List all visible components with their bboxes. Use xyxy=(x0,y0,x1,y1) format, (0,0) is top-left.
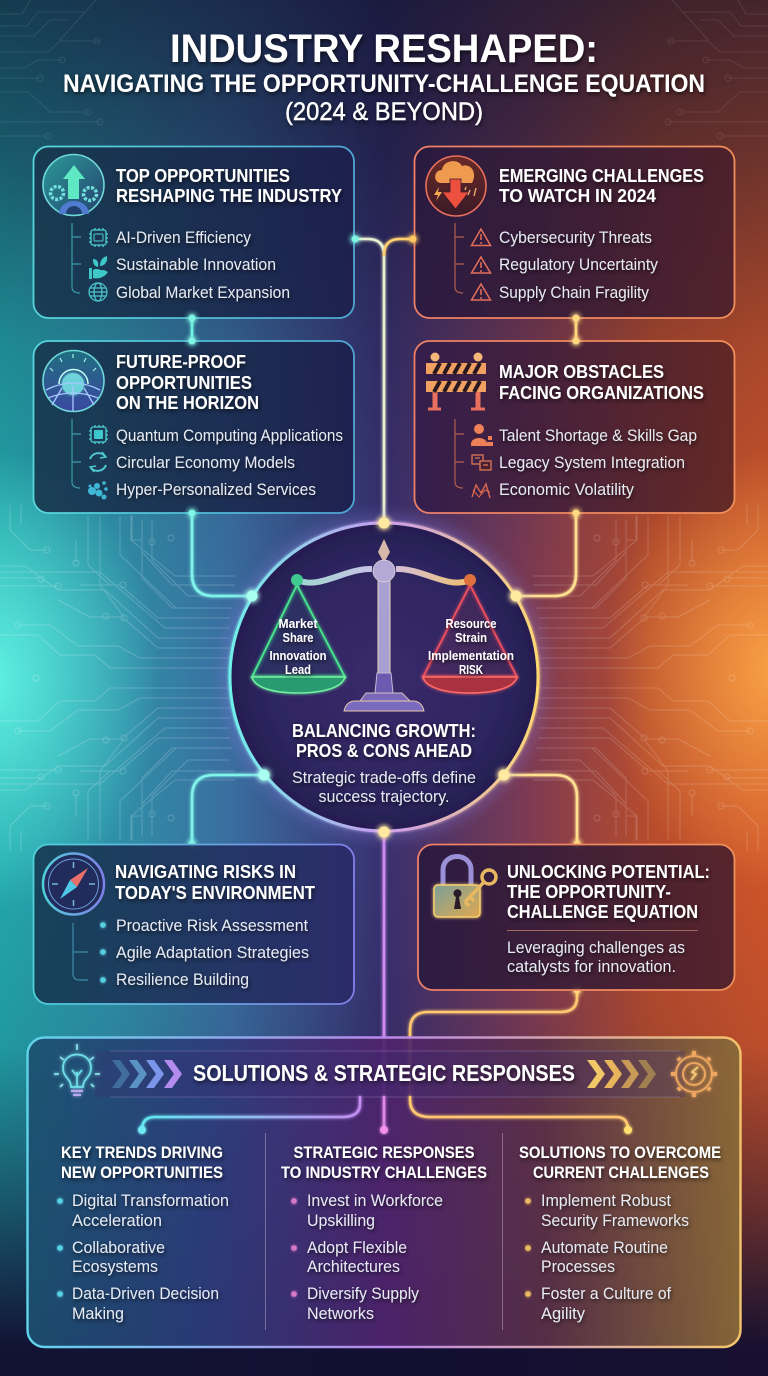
connector nodes: panel joints xyxy=(188,236,580,994)
list items: AI-Driven Efficiency xyxy=(116,228,251,247)
redrawn connectors inside panel xyxy=(142,1097,628,1130)
chevrons left xyxy=(112,1060,182,1088)
icon: light bulb xyxy=(54,1044,100,1095)
list items: Proactive Risk Assessment xyxy=(116,916,308,935)
icon: arrow and gears xyxy=(43,154,104,216)
heading: FUTURE-PROOF xyxy=(116,351,246,372)
description: Leveraging challenges as xyxy=(507,938,685,957)
circle heading: PROS & CONS AHEAD xyxy=(296,740,472,761)
connector nodes xyxy=(138,1126,632,1134)
column items: Digital Transformation xyxy=(72,1191,229,1210)
column items: Architectures xyxy=(307,1257,400,1276)
heading: MAJOR OBSTACLES xyxy=(499,361,664,382)
heading: UNLOCKING POTENTIAL: xyxy=(507,861,710,882)
column items: Making xyxy=(72,1304,124,1323)
list items: Legacy System Integration xyxy=(499,453,685,472)
panel: future-proof opportunities xyxy=(34,341,354,513)
list items: Regulatory Uncertainty xyxy=(499,255,658,274)
heading: TOP OPPORTUNITIES xyxy=(116,165,290,186)
icon: legacy system blocks xyxy=(472,455,491,470)
icon: quantum chip xyxy=(89,425,108,444)
pan labels xyxy=(270,617,514,677)
icon: gear with leaf xyxy=(671,1051,717,1097)
icon: warning triangles xyxy=(472,229,490,300)
list items: Agile Adaptation Strategies xyxy=(116,943,309,962)
bullets xyxy=(100,922,106,983)
list items xyxy=(499,228,658,302)
list items: Economic Volatility xyxy=(499,480,634,499)
title xyxy=(63,27,705,126)
column items: Networks xyxy=(307,1304,374,1323)
column dividers xyxy=(266,1133,502,1330)
icon: sprout in hand xyxy=(89,256,108,279)
bullets xyxy=(57,1198,63,1297)
column heading: KEY TRENDS DRIVING xyxy=(61,1143,223,1162)
list items: Circular Economy Models xyxy=(116,453,295,472)
description xyxy=(507,938,685,976)
icon: horizon xyxy=(43,350,104,412)
panel: navigating risks xyxy=(34,844,354,1004)
list items: Supply Chain Fragility xyxy=(499,283,649,302)
heading xyxy=(115,861,316,903)
circle caption: Strategic trade-offs define xyxy=(292,768,476,787)
heading xyxy=(499,165,704,206)
panel: unlocking potential xyxy=(418,844,734,990)
column heading xyxy=(61,1143,223,1182)
panel: top opportunities xyxy=(34,146,354,318)
column: key trends xyxy=(57,1143,229,1323)
panel title: SOLUTIONS & STRATEGIC RESPONSES xyxy=(193,1060,575,1086)
column heading: CURRENT CHALLENGES xyxy=(533,1163,709,1182)
panel: solutions and strategic responses xyxy=(28,1038,740,1347)
pan labels: Implementation xyxy=(428,649,514,663)
list items: Global Market Expansion xyxy=(116,283,290,302)
column items xyxy=(541,1191,689,1323)
column heading xyxy=(519,1143,721,1182)
column items xyxy=(72,1191,229,1323)
heading: RESHAPING THE INDUSTRY xyxy=(116,185,343,206)
pan labels: Innovation xyxy=(270,649,326,663)
column items: Foster a Culture of xyxy=(541,1284,671,1303)
heading xyxy=(116,165,343,206)
circle heading xyxy=(292,720,476,761)
scale: green pan xyxy=(252,574,345,693)
list items xyxy=(116,916,309,989)
icon: person with gap xyxy=(471,424,493,446)
panel: emerging challenges xyxy=(414,146,734,318)
column items: Diversify Supply xyxy=(307,1284,419,1303)
column heading: SOLUTIONS TO OVERCOME xyxy=(519,1143,721,1162)
pan labels: Share xyxy=(282,631,314,645)
pan labels: Lead xyxy=(285,663,311,677)
icon: padlock and key xyxy=(434,856,496,917)
circle caption xyxy=(292,768,476,806)
central circle: balancing growth xyxy=(221,514,547,840)
heading: TODAY'S ENVIRONMENT xyxy=(115,882,316,903)
column items: Upskilling xyxy=(307,1211,375,1230)
column items: Automate Routine xyxy=(541,1238,668,1257)
column items: Data-Driven Decision xyxy=(72,1284,219,1303)
pan labels: RISK xyxy=(459,663,483,677)
list items: Cybersecurity Threats xyxy=(499,228,652,247)
icon: circular arrows xyxy=(90,452,106,472)
title: NAVIGATING THE OPPORTUNITY-CHALLENGE EQUATION xyxy=(63,70,705,98)
list items: Resilience Building xyxy=(116,970,249,989)
pan labels: Strain xyxy=(455,631,487,645)
description: catalysts for innovation. xyxy=(507,957,676,976)
column items: Processes xyxy=(541,1257,615,1276)
column items: Invest in Workforce xyxy=(307,1191,443,1210)
heading: TO WATCH IN 2024 xyxy=(499,185,657,206)
list items xyxy=(116,228,290,302)
list items: Sustainable Innovation xyxy=(116,255,276,274)
icon: globe xyxy=(89,283,107,301)
heading xyxy=(499,361,704,403)
column heading: NEW OPPORTUNITIES xyxy=(61,1163,223,1182)
heading: NAVIGATING RISKS IN xyxy=(115,861,296,882)
circle nodes xyxy=(246,518,522,838)
circle heading: BALANCING GROWTH: xyxy=(292,720,476,741)
title: INDUSTRY RESHAPED: xyxy=(170,27,598,71)
scale: red pan xyxy=(423,574,517,693)
list tree xyxy=(455,419,464,488)
icon: road barricade xyxy=(426,352,486,409)
column items: Collaborative xyxy=(72,1238,165,1257)
icon: volatility chart xyxy=(472,484,490,498)
column heading: TO INDUSTRY CHALLENGES xyxy=(281,1163,487,1182)
icon: personalised cluster xyxy=(88,481,108,500)
list items: Talent Shortage & Skills Gap xyxy=(499,426,697,445)
title: (2024 & BEYOND) xyxy=(285,98,483,126)
connectors: central network xyxy=(142,239,628,1130)
column: strategic responses xyxy=(281,1143,487,1323)
list tree xyxy=(72,419,81,488)
heading: EMERGING CHALLENGES xyxy=(499,165,704,186)
pan labels: Market xyxy=(278,617,318,631)
list tree xyxy=(455,223,464,293)
heading xyxy=(116,351,259,413)
panel: major obstacles xyxy=(414,341,734,513)
list tree xyxy=(72,223,81,293)
heading xyxy=(507,861,710,922)
column: solutions xyxy=(519,1143,721,1323)
icon: ai chip xyxy=(89,228,108,247)
list items xyxy=(116,426,343,499)
column heading xyxy=(281,1143,487,1182)
heading: ON THE HORIZON xyxy=(116,392,259,413)
bullets xyxy=(291,1198,297,1297)
list items xyxy=(499,426,697,499)
column items: Acceleration xyxy=(72,1211,162,1230)
scale: beam and pillar xyxy=(297,539,470,711)
column heading: STRATEGIC RESPONSES xyxy=(294,1143,474,1162)
column items: Ecosystems xyxy=(72,1257,158,1276)
icon: compass xyxy=(43,854,104,914)
heading: THE OPPORTUNITY- xyxy=(507,881,671,902)
column items: Adopt Flexible xyxy=(307,1238,407,1257)
bullets xyxy=(525,1198,531,1297)
list items: Hyper-Personalized Services xyxy=(116,480,316,499)
heading: OPPORTUNITIES xyxy=(116,372,252,393)
list tree xyxy=(73,923,88,980)
icon: cloud with down arrow xyxy=(426,156,486,216)
heading: CHALLENGE EQUATION xyxy=(507,901,698,922)
circle caption: success trajectory. xyxy=(318,787,450,806)
column items: Security Frameworks xyxy=(541,1211,689,1230)
heading: FACING ORGANIZATIONS xyxy=(499,382,704,403)
pan labels: Resource xyxy=(446,617,497,631)
list items: Quantum Computing Applications xyxy=(116,426,343,445)
column items: Implement Robust xyxy=(541,1191,671,1210)
column items xyxy=(307,1191,443,1323)
chevrons right xyxy=(587,1060,656,1088)
column items: Agility xyxy=(541,1304,585,1323)
